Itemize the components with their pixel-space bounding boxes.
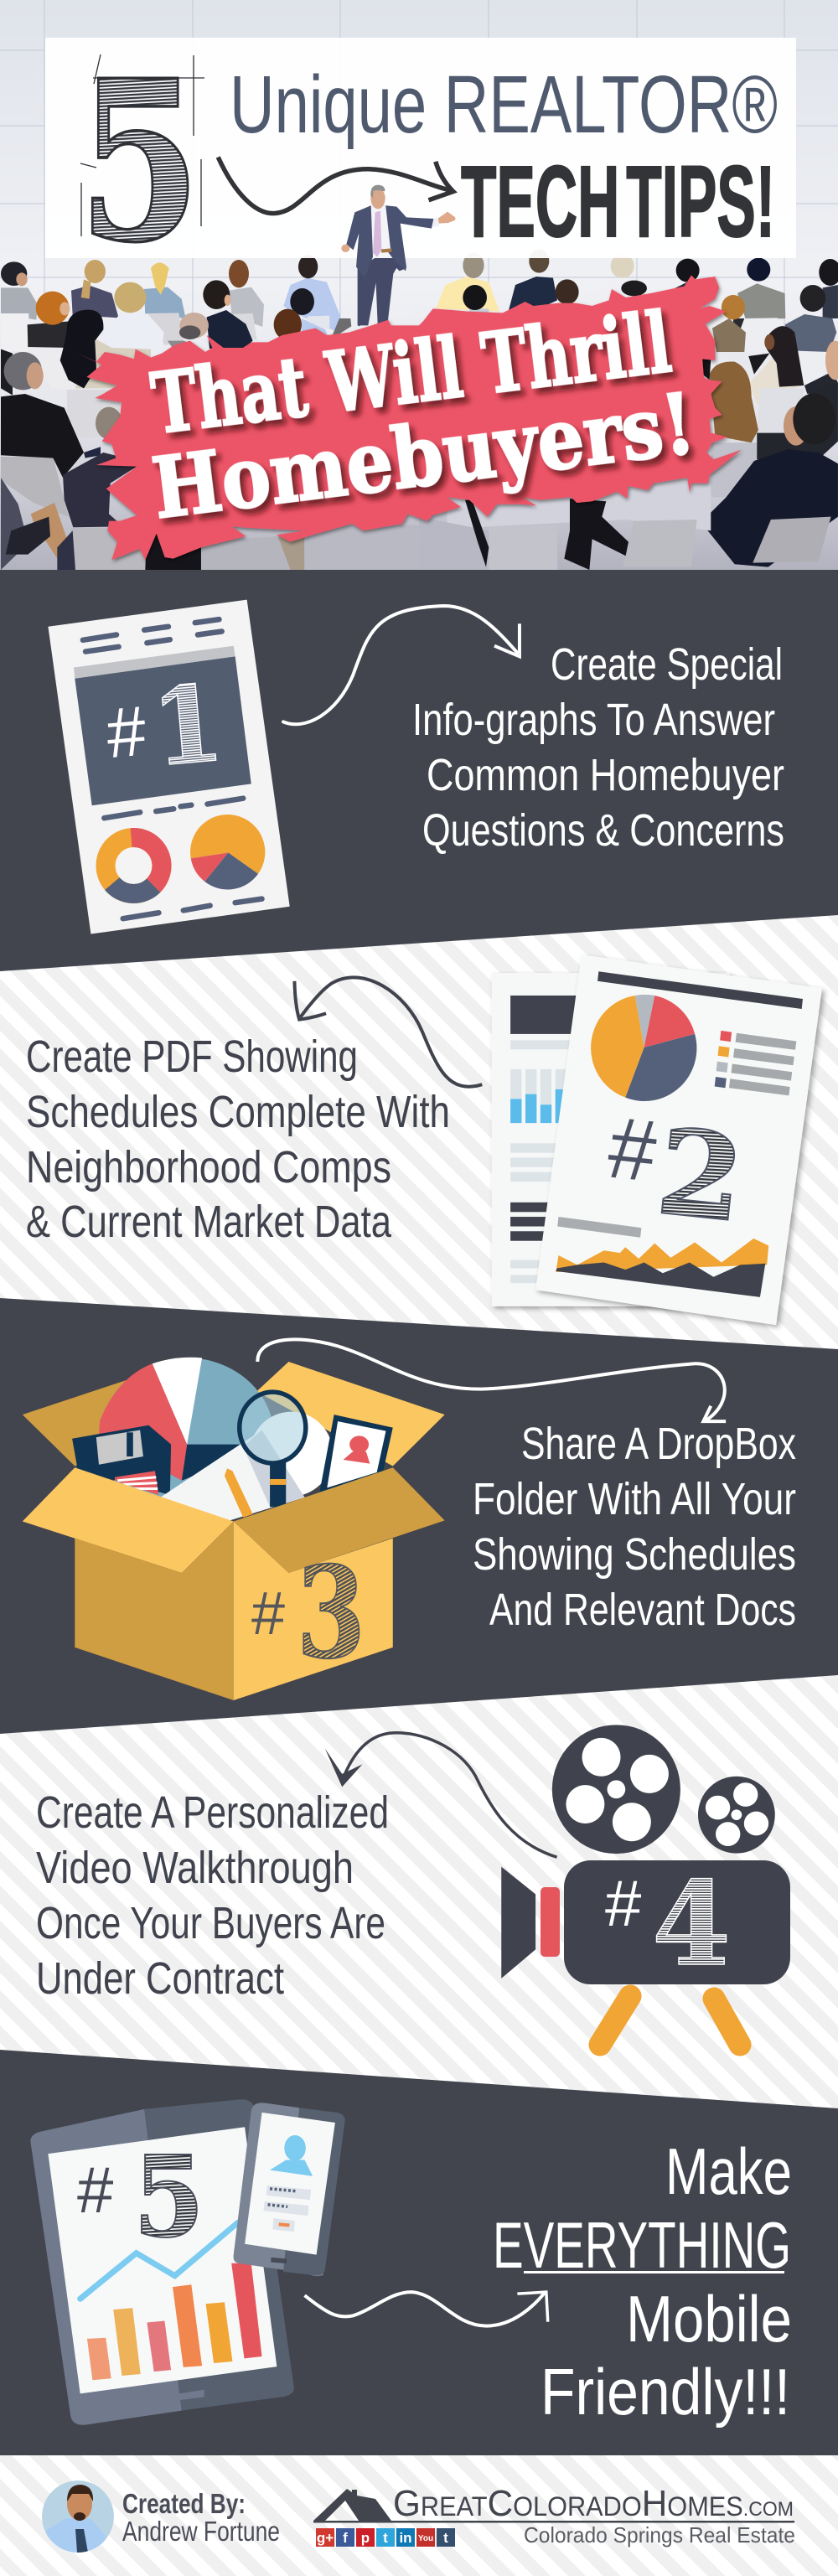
arrow: tip 4 bbox=[325, 1733, 557, 1857]
text block: tip 5: Make bbox=[665, 2134, 792, 2208]
logo tagline: Colorado Springs Real Estate bbox=[524, 2522, 795, 2548]
logo house bbox=[313, 2489, 391, 2521]
social icons bbox=[316, 2528, 455, 2547]
author portrait bbox=[42, 2480, 114, 2556]
badge #4: # bbox=[605, 1866, 641, 1940]
badge #1: # bbox=[103, 691, 149, 773]
text block: tip 4 bbox=[36, 1787, 389, 2004]
badge #3 bbox=[251, 1539, 365, 1687]
audience photo, left half bbox=[1, 251, 419, 572]
logo wordmark: GREATCOLORADOHOMES.COM bbox=[393, 2483, 794, 2524]
social icons: f bbox=[343, 2530, 348, 2546]
badge #3: 3 bbox=[297, 1539, 365, 1687]
text block: tip 2: Create PDF Showing bbox=[26, 1032, 358, 1082]
social icons: in bbox=[399, 2530, 412, 2546]
badge #1 bbox=[101, 660, 228, 794]
tip 4 illustration: film camera bbox=[501, 1725, 790, 2045]
social icons: t bbox=[383, 2530, 388, 2546]
social icons: t bbox=[443, 2530, 448, 2546]
footer: author: Andrew Fortune bbox=[122, 2516, 280, 2547]
badge #2: 2 bbox=[650, 1103, 750, 1249]
panel: header photo bbox=[0, 0, 838, 572]
audience photo, right half bbox=[419, 250, 838, 570]
text block: tip 5 bbox=[493, 2134, 792, 2429]
tip 2 illustration: reports bbox=[492, 954, 822, 1325]
big sketched 5: 5 bbox=[78, 33, 201, 292]
social icons: p bbox=[361, 2530, 370, 2546]
badge #4 bbox=[605, 1855, 731, 1992]
title text block bbox=[78, 33, 778, 292]
title banner bbox=[45, 38, 796, 258]
arrow: tip 3 bbox=[257, 1339, 726, 1421]
footer: author bbox=[42, 2480, 280, 2556]
phone bbox=[234, 2103, 345, 2276]
text block: tip 1 bbox=[412, 639, 784, 856]
badge #2: # bbox=[604, 1099, 661, 1201]
tip 3 illustration: box bbox=[23, 1358, 445, 1700]
badge #5: # bbox=[77, 2153, 113, 2227]
panel: tip 3 dark band bbox=[0, 1298, 838, 1734]
tip 1 illustration: infographic sheet bbox=[48, 600, 290, 934]
footer: logo bbox=[313, 2483, 795, 2548]
badge #1: 1 bbox=[147, 660, 228, 790]
author credit: Created By: bbox=[122, 2488, 246, 2519]
text block: tip 4: Video Walkthrough bbox=[36, 1843, 354, 1893]
text block: tip 2: & Current Market Data bbox=[26, 1197, 392, 1247]
social icons: g+ bbox=[317, 2530, 334, 2546]
text block: tip 5: Friendly!!! bbox=[541, 2355, 790, 2429]
burst heading: Homebuyers: Homebuyers! bbox=[147, 375, 700, 538]
text block: tip 3 bbox=[473, 1419, 796, 1635]
badge #3: # bbox=[251, 1580, 285, 1648]
burst shape bbox=[77, 275, 742, 560]
arrow: tip 1 bbox=[283, 606, 520, 724]
camera legs bbox=[600, 1996, 740, 2045]
badge #4: 4 bbox=[652, 1855, 731, 1992]
text block: tip 4: Create A Personalized bbox=[36, 1787, 389, 1838]
arrow: tip 5 bbox=[305, 2292, 548, 2326]
social icons: You bbox=[418, 2534, 433, 2543]
text block: tip 2: Neighborhood Comps bbox=[26, 1142, 391, 1192]
tablet bbox=[30, 2099, 294, 2425]
text block: tip 2: Schedules Complete With bbox=[26, 1087, 450, 1137]
text block: tip 5: Mobile bbox=[626, 2282, 792, 2356]
text block: tip 4: Once Your Buyers Are bbox=[36, 1898, 385, 1948]
red burst banner bbox=[77, 275, 742, 560]
presenter bbox=[341, 185, 455, 325]
tip 5 illustration: tablet and phone bbox=[30, 2099, 345, 2425]
badge #2 bbox=[600, 1098, 750, 1249]
text block: tip 2 bbox=[26, 1032, 450, 1247]
panel: tip 1 dark band bbox=[0, 570, 838, 971]
arrow: tip 2 bbox=[294, 977, 482, 1087]
badge #5: 5 bbox=[133, 2132, 204, 2263]
panel: tip 5 dark band bbox=[0, 2050, 838, 2455]
back report bbox=[492, 973, 730, 1306]
badge #5 bbox=[77, 2132, 204, 2263]
front report bbox=[535, 954, 822, 1325]
text block: tip 4: Under Contract bbox=[36, 1953, 284, 2004]
arrow: header curve bbox=[218, 157, 453, 214]
